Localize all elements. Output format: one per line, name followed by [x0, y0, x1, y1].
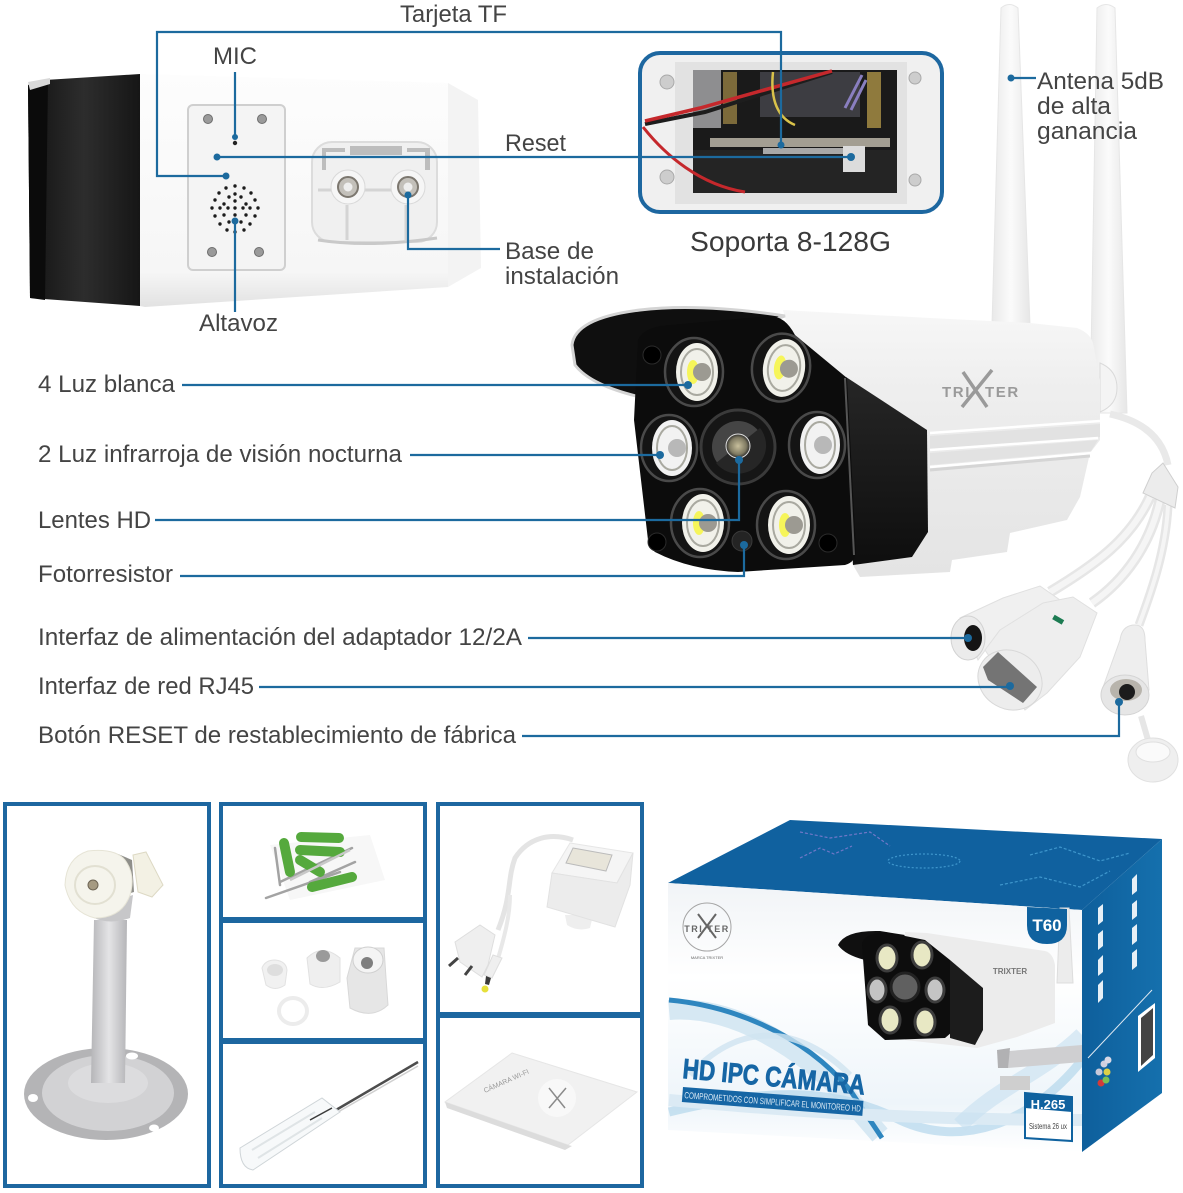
label: Antena: Antena 5dB — [1037, 68, 1164, 95]
subtitle band on box: COMPROMETIDOS CON SIMPLIFICAR EL MONITOREO HD — [684, 1090, 862, 1114]
title on box: HD IPC CÁMARA — [681, 1053, 867, 1101]
label: Reset: Reset — [505, 130, 566, 157]
front face — [634, 316, 856, 572]
side face — [846, 377, 928, 565]
feature labels — [38, 1, 1164, 749]
TRIXTER logo: TER — [985, 384, 1020, 401]
panel: waterproof fittings — [221, 921, 425, 1040]
panel: power adapter — [438, 804, 642, 1014]
label: Interfaz alimentación: Interfaz de alimentación del adaptador 12/2A — [38, 624, 522, 651]
box waves — [669, 1000, 1082, 1138]
callout line: reset button — [522, 698, 1123, 736]
TRIXTER logo: TRI — [942, 384, 971, 401]
callout line: alimentación — [528, 634, 972, 642]
label: Antena: ganancia — [1037, 118, 1138, 145]
callout line: MIC — [232, 72, 238, 140]
box: side face — [1082, 839, 1162, 1152]
panel: wall mount — [5, 804, 209, 1186]
product box — [668, 820, 1162, 1152]
callout line: luz blanca — [182, 381, 692, 389]
panel: screwdriver — [221, 1042, 425, 1186]
T60 badge: T60 — [1032, 916, 1062, 935]
panel: manual — [438, 1016, 642, 1186]
photo: memory card slot compartment — [640, 53, 942, 212]
label: MIC: MIC — [213, 43, 257, 70]
box camera illustration: TRIXTER — [993, 967, 1027, 976]
callout line: luz infrarroja — [410, 451, 664, 459]
callout line: lentes — [155, 456, 743, 520]
T60 badge — [1027, 907, 1067, 944]
TRIXTER logo — [942, 370, 1020, 407]
white LEDs — [665, 330, 815, 559]
infrared LEDs — [641, 412, 845, 481]
callout line: fotorresistor — [180, 541, 748, 576]
label: Fotorresistor: Fotorresistor — [38, 561, 173, 588]
H.265 badge: Sistema 26 ux — [1029, 1122, 1067, 1131]
antennas — [992, 4, 1127, 413]
label: Tarjeta TF: Tarjeta TF — [400, 1, 507, 28]
callout lines — [155, 32, 1123, 736]
box camera illustration — [838, 931, 1082, 1090]
Y splitter — [1143, 463, 1178, 508]
HD lens — [701, 410, 775, 484]
camera body — [783, 310, 1100, 577]
box top — [668, 820, 1162, 910]
box front — [668, 883, 1082, 1152]
H.265 badge — [1025, 1093, 1072, 1141]
label: Antena: de alta — [1037, 93, 1112, 120]
panel: screws and anchors — [221, 804, 425, 919]
reset connector — [1101, 625, 1149, 740]
callout line: Reset — [214, 153, 855, 161]
label: Soporta: Soporta 8-128G — [690, 226, 891, 257]
power connector — [951, 586, 1060, 660]
label: 2 Luz infrarroja: 2 Luz infrarroja de visión nocturna — [38, 441, 403, 468]
callout line: antena — [1008, 74, 1036, 82]
panel: manual: CÁMARA WI-FI — [482, 1067, 530, 1095]
RJ45 connector — [967, 597, 1097, 722]
photo: back of camera with speaker panel — [28, 74, 481, 307]
cables and connectors — [951, 414, 1178, 782]
mini camera antenna — [1057, 908, 1073, 983]
logo on box: TRI TER — [684, 924, 730, 934]
H.265 badge: H.265 — [1031, 1097, 1065, 1112]
main camera — [572, 308, 1100, 577]
callout line: base — [404, 192, 500, 249]
label: Base de instalación: Base de — [505, 238, 594, 265]
label: Botón RESET: Botón RESET de restablecimiento de fábrica — [38, 722, 517, 749]
photoresistor — [732, 531, 752, 551]
app icons — [1096, 1056, 1112, 1086]
label: 4 Luz blanca: 4 Luz blanca — [38, 371, 176, 398]
callout line: RJ45 — [259, 682, 1014, 690]
label: Base de instalación: instalación — [505, 263, 619, 290]
subtitle band on box — [682, 1087, 863, 1116]
QR code — [1138, 1003, 1155, 1072]
rubber cap — [1128, 738, 1178, 782]
logo on box — [683, 903, 731, 960]
label: Lentes HD: Lentes HD — [38, 507, 151, 534]
label: Interfaz RJ45: Interfaz de red RJ45 — [38, 673, 254, 700]
callout line: Tarjeta TF — [157, 32, 784, 180]
callout line: altavoz — [232, 218, 238, 312]
logo on box: MARCA TRIXTER — [691, 955, 723, 960]
label: Altavoz: Altavoz — [199, 310, 278, 337]
visor — [572, 308, 785, 397]
